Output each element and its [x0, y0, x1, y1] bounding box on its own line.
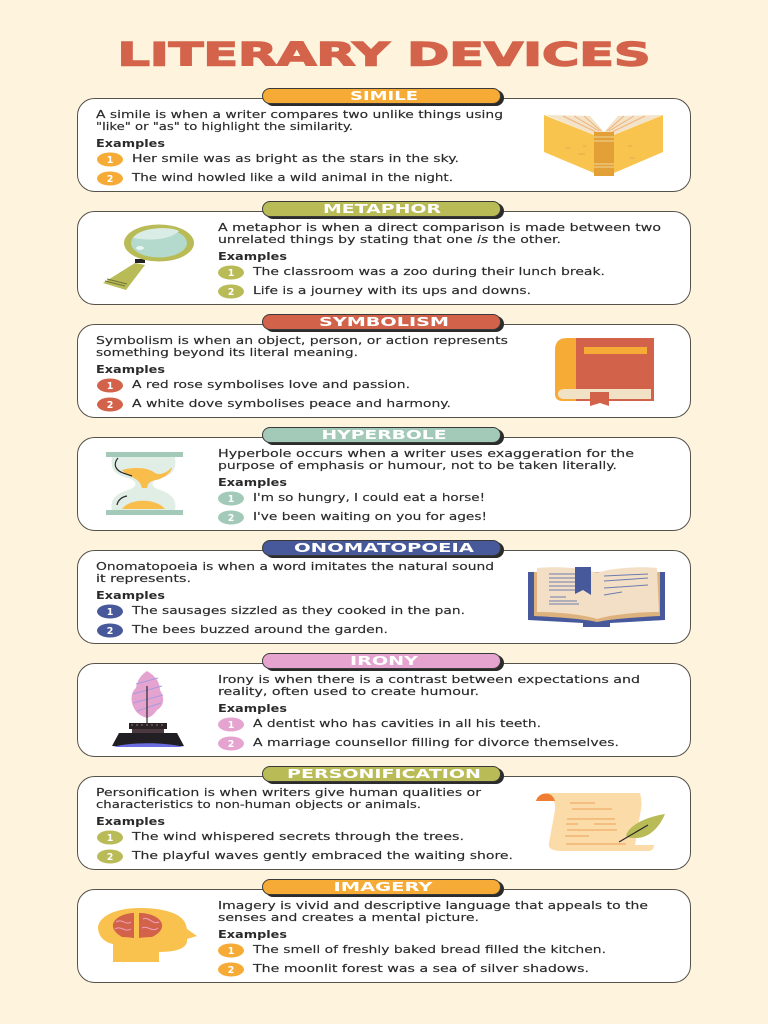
icon: head with brain [98, 908, 197, 962]
heading: personification: PERSONIFICATION [287, 766, 481, 781]
example 1: I'm so hungry, I could eat a horse! [253, 491, 485, 504]
example 2 [97, 171, 453, 186]
example 1 [97, 152, 459, 166]
description: simile [96, 108, 503, 133]
example 2 [218, 736, 619, 750]
example 2 [97, 397, 451, 412]
heading: simile [262, 88, 504, 106]
example 1: 1 [228, 494, 234, 505]
example 2: A marriage counsellor filling for divorce themselves. [253, 736, 619, 749]
example 2: 2 [228, 513, 234, 524]
example 2 [97, 623, 388, 638]
heading: symbolism [262, 314, 504, 332]
example 2 [218, 284, 531, 298]
description: irony: reality, often used to create humour. [218, 685, 479, 698]
example 2: A white dove symbolises peace and harmony. [132, 397, 451, 410]
title: LITERARY DEVICES [118, 36, 650, 74]
example 2 [218, 510, 487, 524]
example 2: 2 [228, 739, 234, 750]
panel: hyperbole [78, 427, 690, 530]
example 1: The smell of freshly baked bread filled the kitchen. [252, 943, 606, 956]
description: personification: characteristics to non-human objects or animals. [96, 798, 421, 811]
example 2: 2 [107, 400, 113, 411]
panel: irony [78, 653, 690, 756]
example 2: The wind howled like a wild animal in the night. [131, 171, 453, 184]
description: personification [96, 786, 482, 811]
description: onomatopoeia [96, 560, 494, 585]
example 2: The bees buzzed around the garden. [131, 623, 388, 636]
heading: irony: IRONY [350, 653, 419, 668]
heading: metaphor [262, 201, 504, 219]
heading: hyperbole [262, 427, 504, 445]
example 2: The moonlit forest was a sea of silver shadows. [252, 962, 589, 975]
description: simile: A simile is when a writer compares two unlike things using [96, 108, 503, 121]
example 1: The classroom was a zoo during their lunch break. [252, 265, 605, 278]
description: irony [218, 673, 640, 698]
description: onomatopoeia: it represents. [96, 572, 191, 585]
example 2: 2 [107, 626, 113, 637]
description: simile: "like" or "as" to highlight the similarity. [96, 120, 353, 133]
example 1 [218, 491, 485, 506]
heading: onomatopoeia [262, 540, 504, 558]
example 1: The wind whispered secrets through the trees. [131, 830, 464, 843]
heading: imagery [262, 879, 504, 897]
examples heading: Examples [218, 251, 287, 263]
example 2 [97, 849, 513, 864]
examples heading: Examples [218, 929, 287, 941]
description: symbolism: Symbolism is when an object, person, or action represents [96, 334, 508, 347]
example 2: 2 [107, 174, 113, 185]
examples heading: Examples [96, 816, 165, 828]
icon: magnifying glass [103, 224, 194, 290]
description: hyperbole: purpose of emphasis or humour, not to be taken literally. [218, 459, 617, 472]
description: metaphor: unrelated things by stating that one is the other. [218, 233, 561, 246]
heading: symbolism: SYMBOLISM [319, 314, 449, 329]
description: metaphor: A metaphor is when a direct comparison is made between two [218, 221, 661, 234]
example 1: 1 [228, 720, 234, 731]
example 1: Her smile was as bright as the stars in the sky. [132, 152, 459, 165]
examples heading: Examples [96, 138, 165, 150]
example 1: The sausages sizzled as they cooked in the pan. [131, 604, 465, 617]
example 2: I've been waiting on you for ages! [253, 510, 487, 523]
icon: red book [555, 338, 654, 406]
heading: metaphor: METAPHOR [323, 201, 442, 216]
description: imagery: Imagery is vivid and descriptive language that appeals to the [218, 899, 648, 912]
description: hyperbole: Hyperbole occurs when a writer uses exaggeration for the [218, 447, 634, 460]
example 1: A dentist who has cavities in all his teeth. [253, 717, 541, 730]
example 2: Life is a journey with its ups and downs. [253, 284, 531, 297]
examples heading: Examples [96, 364, 165, 376]
heading: hyperbole: HYPERBOLE [322, 427, 446, 442]
panel: symbolism [78, 314, 690, 418]
example 1 [97, 604, 465, 618]
heading: simile: SIMILE [350, 88, 418, 103]
description: metaphor [218, 221, 661, 246]
panel: onomatopoeia [78, 540, 690, 644]
icon: hourglass [106, 452, 183, 515]
example 2: 2 [228, 287, 234, 298]
description: hyperbole [218, 447, 634, 472]
example 1 [97, 830, 464, 844]
panel: personification [78, 766, 690, 870]
icon: feather and inkwell [112, 671, 184, 747]
example 2 [218, 962, 589, 976]
heading: personification [262, 766, 504, 784]
example 1 [97, 378, 410, 392]
icon: open book [528, 567, 665, 627]
example 1 [218, 717, 541, 732]
example 1: 1 [228, 946, 234, 957]
example 2: The playful waves gently embraced the waiting shore. [131, 849, 513, 862]
heading: irony [262, 653, 504, 671]
examples heading: Examples [96, 590, 165, 602]
icon: scroll and quill [536, 793, 665, 851]
panel: imagery [78, 879, 690, 982]
description: irony: Irony is when there is a contrast between expectations and [218, 673, 640, 686]
example 1: 1 [107, 155, 113, 166]
description: imagery: senses and creates a mental picture. [218, 911, 479, 924]
description: symbolism: something beyond its literal meaning. [96, 346, 358, 359]
description: personification: Personification is when writers give human qualities or [96, 786, 482, 799]
example 1: 1 [107, 833, 113, 844]
heading: imagery: IMAGERY [334, 879, 434, 894]
example 1: A red rose symbolises love and passion. [132, 378, 410, 391]
icon: closed book [544, 115, 663, 176]
heading: onomatopoeia: ONOMATOPOEIA [294, 540, 474, 555]
example 1 [218, 943, 606, 958]
examples heading: Examples [218, 703, 287, 715]
example 1: 1 [107, 607, 113, 618]
panel: metaphor [78, 201, 690, 304]
example 1: 1 [107, 381, 113, 392]
description: onomatopoeia: Onomatopoeia is when a word imitates the natural sound [96, 560, 494, 573]
description: imagery [218, 899, 648, 924]
example 2: 2 [228, 965, 234, 976]
example 2: 2 [107, 852, 113, 863]
description: symbolism [96, 334, 508, 359]
example 1 [218, 265, 605, 280]
panel: simile [78, 88, 690, 192]
example 1: 1 [228, 268, 234, 279]
examples heading: Examples [218, 477, 287, 489]
